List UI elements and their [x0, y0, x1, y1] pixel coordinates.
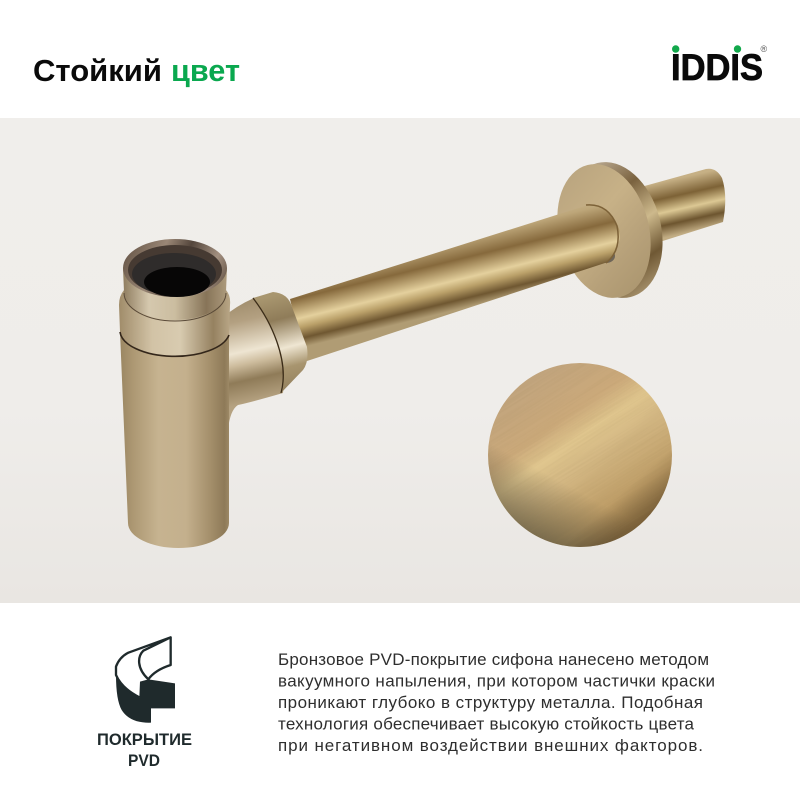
wall flange	[544, 152, 676, 308]
icon caption: ПОКРЫТИЕ	[97, 730, 192, 749]
description text: при негативном воздействии внешних факторов.	[278, 736, 703, 755]
ring shadow line	[124, 293, 226, 321]
logo: IDDIS: ®	[760, 44, 768, 54]
description text: вакуумного напыления, при котором частички краски	[278, 672, 715, 690]
horizontal pipe	[290, 205, 620, 362]
description text: технология обеспечивает высокую стойкость цвета	[278, 714, 695, 734]
description text: Бронзовое PVD-покрытие сифона нанесено методом	[278, 650, 709, 669]
elbow	[215, 298, 286, 430]
photo background	[0, 118, 800, 603]
inner rim	[128, 245, 222, 295]
vertical body	[120, 332, 229, 548]
gasket	[132, 253, 216, 295]
seam line	[120, 332, 229, 356]
description text: проникают глубоко в структуру металла. Подобная	[278, 693, 703, 712]
pipe end collar edge	[586, 205, 618, 263]
product photo panel	[0, 118, 800, 603]
pipe joint collar	[253, 292, 308, 393]
collar	[119, 290, 230, 356]
logo: IDDIS: IDDIS	[671, 47, 763, 88]
title: цвет	[171, 53, 240, 88]
title	[33, 53, 240, 88]
product: bottle trap siphon	[119, 152, 725, 548]
upper ring	[123, 268, 227, 320]
description text	[278, 650, 715, 755]
top rim	[123, 239, 227, 297]
icon caption	[97, 730, 192, 770]
stub pipe behind flange	[630, 169, 725, 245]
joint seam	[253, 298, 283, 393]
title: Стойкий	[33, 53, 162, 88]
brushed metal disc	[488, 363, 672, 547]
drain opening	[144, 267, 210, 297]
icon caption: PVD	[128, 751, 160, 770]
icon: PVD coating	[116, 637, 175, 723]
